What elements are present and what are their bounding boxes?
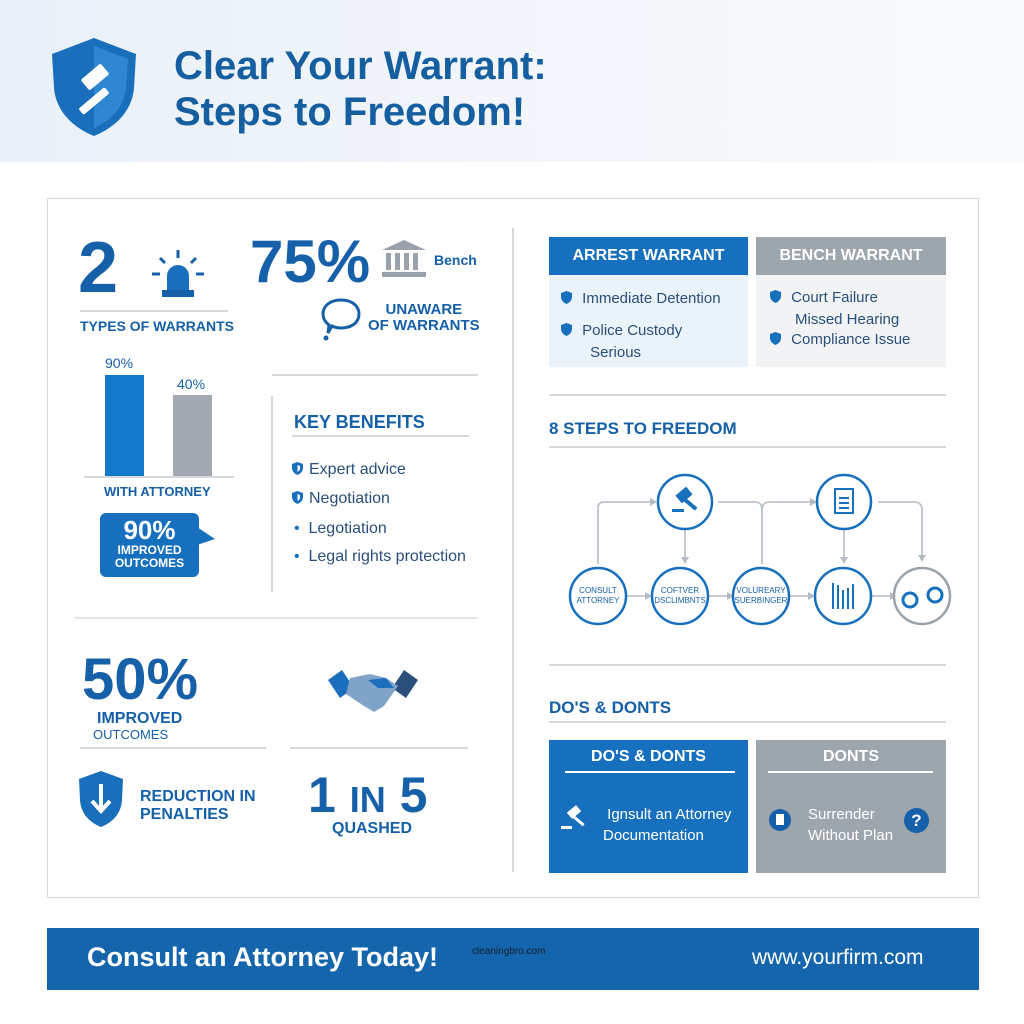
- stat: 2 types of warrants: [78, 228, 234, 334]
- callout: 90% improved outcomes: 90%: [123, 515, 176, 545]
- panel: bench warrant: [756, 237, 946, 367]
- stat: 2 types of warrants: 2: [78, 228, 118, 308]
- footer bar: Consult an Attorney Today!: [87, 942, 438, 972]
- stat: 50% improved outcomes: [82, 647, 198, 742]
- callout: 90% improved outcomes: [100, 513, 215, 577]
- reduction in penalties: REDUCTION IN: [140, 788, 256, 805]
- icon: document: [769, 809, 791, 831]
- bar chart: WITH ATTORNEY: [104, 484, 211, 499]
- panel: bench warrant: Missed Hearing: [795, 311, 899, 328]
- panel: arrest warrant: ARREST WARRANT: [572, 247, 724, 264]
- stat: 75% bench: 75%: [250, 228, 370, 295]
- stat: 75% bench: UNAWARE: [386, 301, 462, 318]
- stat: 50% improved outcomes: IMPROVED: [97, 710, 182, 727]
- icon: shield with gavel: [52, 38, 136, 136]
- flow diagram: steps: VOLUREARY: [736, 586, 786, 595]
- panel: arrest warrant: Serious: [590, 344, 641, 361]
- panel: donts: DONTS: [823, 748, 879, 765]
- bar chart: [84, 355, 234, 499]
- panel: arrest warrant: [549, 237, 748, 367]
- icon: question: ?: [911, 811, 922, 830]
- heading: 8 steps: 8 STEPS TO FREEDOM: [549, 419, 737, 438]
- panel: bench warrant: Compliance Issue: [791, 331, 910, 348]
- callout: 90% improved outcomes: OUTCOMES: [115, 556, 184, 570]
- panel: dos: Documentation: [603, 827, 704, 844]
- flow diagram: steps: DSCLIMBNTS: [654, 596, 706, 605]
- icon: gavel: [561, 805, 585, 829]
- icon: handshake: [328, 670, 418, 712]
- header background: [0, 0, 1024, 162]
- icon: question: [904, 808, 929, 833]
- panel: arrest warrant: Immediate Detention: [582, 290, 721, 307]
- flow diagram: steps: [568, 474, 952, 626]
- flow diagram: steps: ATTORNEY: [577, 596, 620, 605]
- bar chart: 40%: [177, 376, 205, 392]
- flow diagram: steps: SUERBINGER: [735, 596, 788, 605]
- key benefits list: • Legotiation: [294, 520, 387, 537]
- panel: donts: Surrender: [808, 806, 875, 823]
- stat: 50% improved outcomes: 50%: [82, 647, 198, 712]
- title: Steps to Freedom!: [174, 90, 525, 134]
- panel: arrest warrant: Police Custody: [582, 322, 682, 339]
- stat: 75% bench: Bench: [434, 252, 477, 268]
- stat: 1 in 5 quashed: QUASHED: [332, 820, 412, 837]
- stat: 1 in 5 quashed: 1 IN 5: [308, 767, 427, 823]
- panel: dos: [549, 740, 748, 873]
- flow diagram: steps: CONSULT: [579, 586, 617, 595]
- callout: 90% improved outcomes: IMPROVED: [117, 543, 182, 557]
- footer bar: cleaningbro.com: [472, 946, 545, 957]
- reduction in penalties: [79, 771, 256, 827]
- panel: dos: Ignsult an Attorney: [607, 806, 731, 823]
- stat: 50% improved outcomes: OUTCOMES: [93, 727, 168, 742]
- key benefits list: • Legal rights protection: [294, 548, 466, 565]
- panel: donts: [756, 740, 946, 873]
- footer bar: www.yourfirm.com: [752, 946, 924, 969]
- key benefits list: Negotiation: [309, 490, 390, 507]
- stat: 75% bench: OF WARRANTS: [368, 317, 480, 334]
- panel: bench warrant: Court Failure: [791, 289, 878, 306]
- flow diagram: steps: COFTVER: [661, 586, 699, 595]
- panel: bench warrant: BENCH WARRANT: [779, 247, 923, 264]
- key benefits list: [292, 412, 469, 565]
- main panel: [47, 198, 979, 898]
- bar chart: 90%: [105, 355, 133, 371]
- heading: dos and donts: DO'S & DONTS: [549, 698, 671, 717]
- panel: donts: Without Plan: [808, 827, 893, 844]
- key benefits list: KEY BENEFITS: [294, 412, 425, 432]
- icon: siren: [152, 250, 204, 297]
- icon: courthouse: [382, 240, 426, 277]
- title: [174, 44, 547, 134]
- stat: 75% bench: [250, 228, 480, 340]
- icon: speech bubble: [322, 298, 360, 340]
- title: Clear Your Warrant:: [174, 44, 547, 88]
- icon: shield down arrow: [79, 771, 123, 827]
- key benefits list: Expert advice: [309, 461, 406, 478]
- stat: 2 types of warrants: TYPES OF WARRANTS: [80, 318, 234, 334]
- footer bar: [47, 928, 979, 990]
- reduction in penalties: PENALTIES: [140, 806, 229, 823]
- panel: dos: DO'S & DONTS: [591, 748, 706, 765]
